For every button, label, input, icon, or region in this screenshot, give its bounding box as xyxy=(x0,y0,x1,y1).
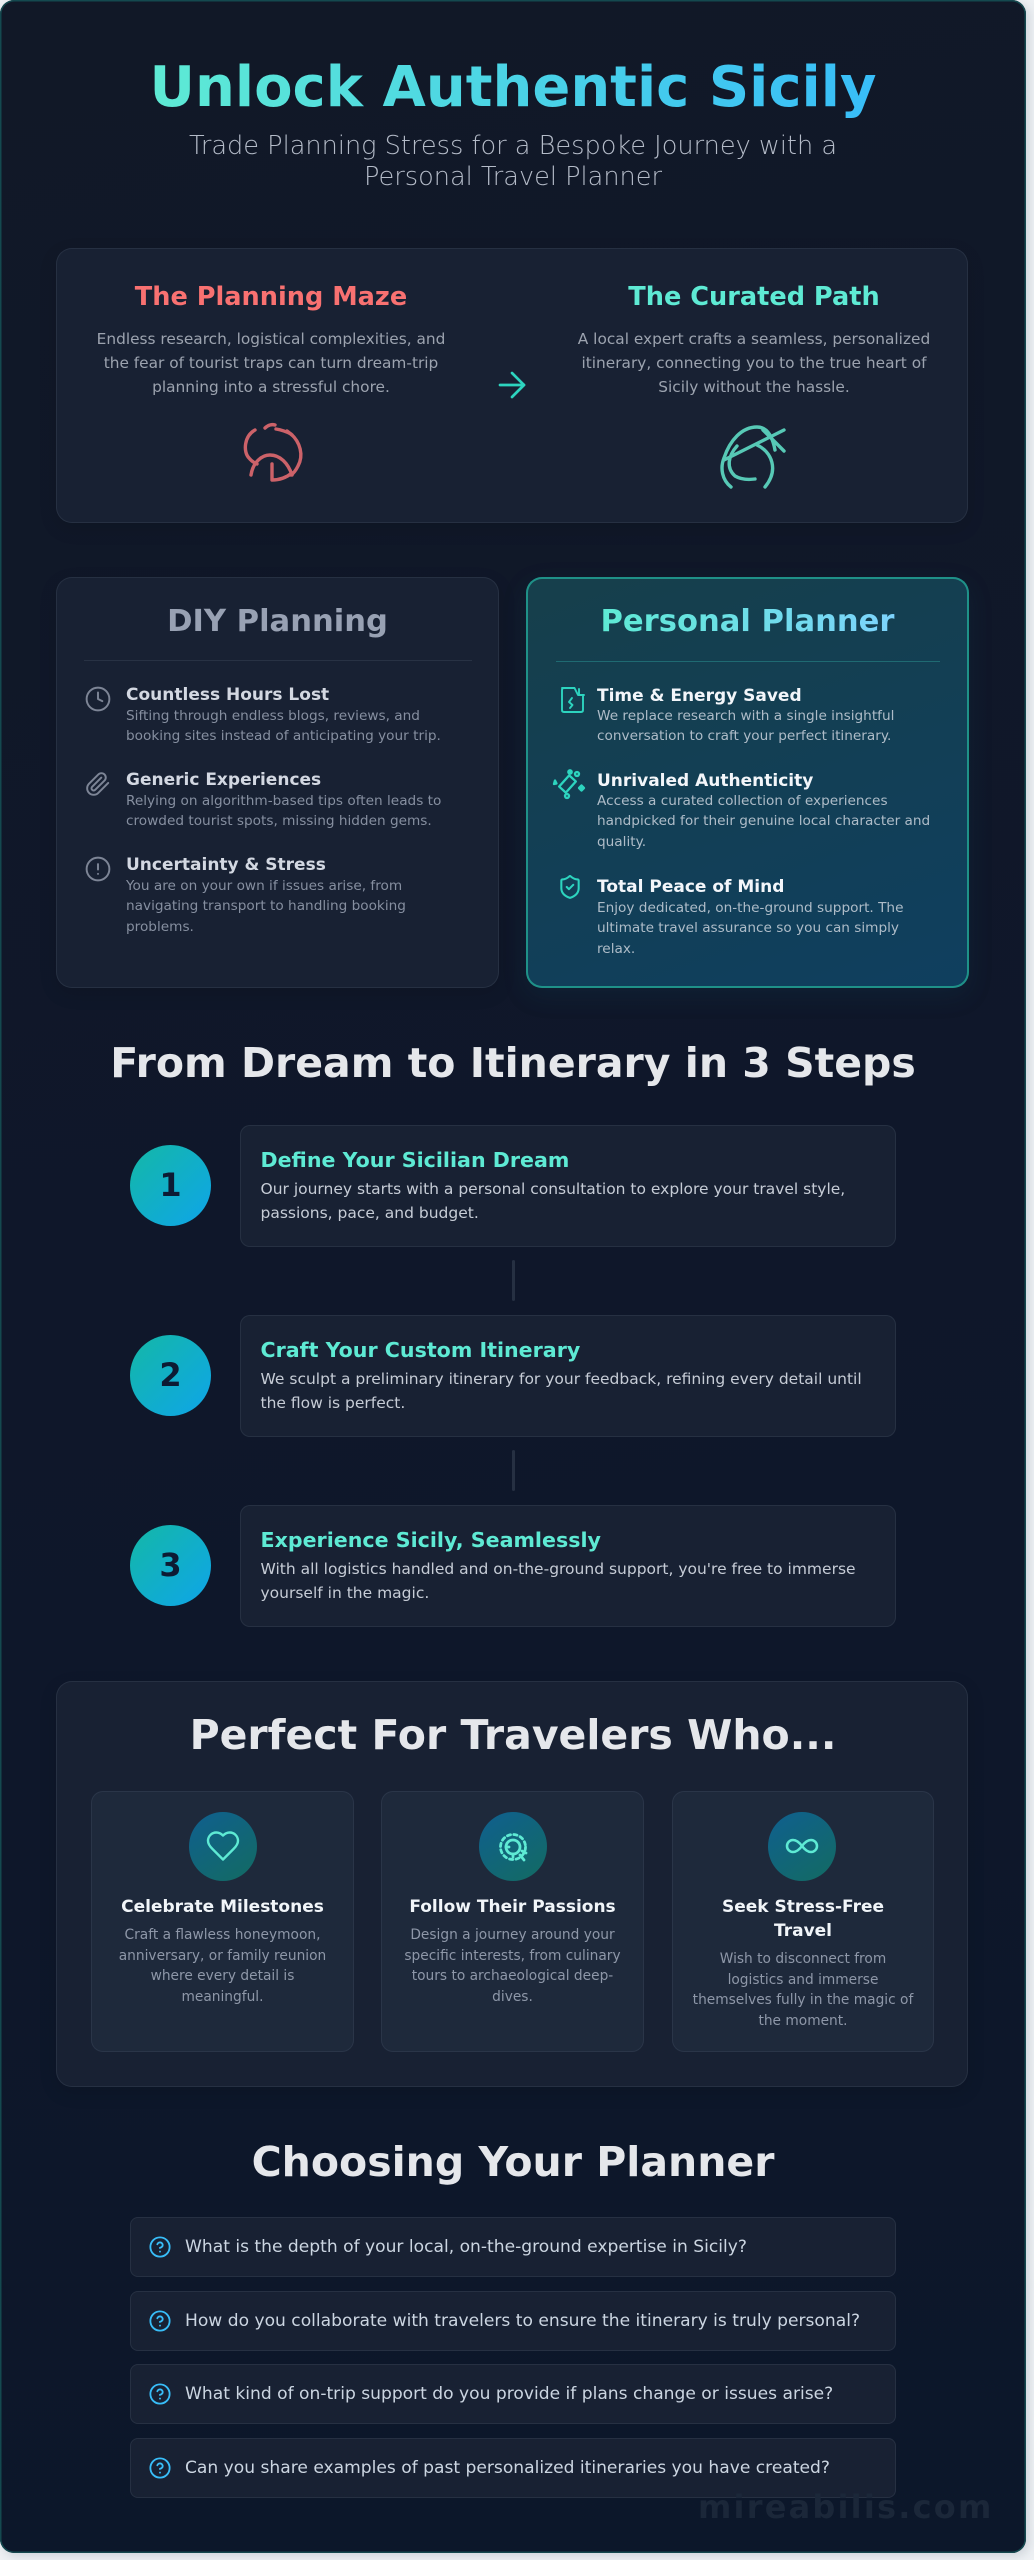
item description: booking sites instead of anticipating your trip. xyxy=(126,728,441,744)
panel: DIY planning xyxy=(56,577,499,988)
card description: anniversary, or family reunion xyxy=(119,1948,326,1964)
card title xyxy=(722,1897,884,1941)
item title: Countless Hours Lost xyxy=(126,685,329,705)
item description: Relying on algorithm-based tips often leads to xyxy=(126,793,441,809)
card description: Wish to disconnect from xyxy=(720,1951,886,1967)
panel: planning maze to curated path xyxy=(56,248,968,523)
card description: dives. xyxy=(492,1988,533,2004)
question text: How do you collaborate with travelers to ensure the itinerary is truly personal? xyxy=(185,2311,860,2331)
item: time and energy saved xyxy=(561,686,894,744)
step 2 description: the flow is perfect. xyxy=(260,1394,405,1412)
question 4 xyxy=(130,2438,896,2498)
card title: Follow Their Passions xyxy=(409,1897,616,1917)
question text: What is the depth of your local, on-the-ground expertise in Sicily? xyxy=(185,2237,747,2257)
heading: the planning maze: The Planning Maze xyxy=(135,282,407,312)
step 3 description: With all logistics handled and on-the-ground support, you're free to immerse xyxy=(260,1560,856,1578)
icon: help circle xyxy=(149,2236,170,2258)
icon: globe path xyxy=(720,425,786,489)
card description: themselves fully in the magic of xyxy=(693,1992,913,2008)
item description: relax. xyxy=(597,941,635,957)
step 1 description xyxy=(260,1180,845,1222)
question text: Can you share examples of past personalized itineraries you have created? xyxy=(185,2458,830,2478)
question 1 xyxy=(130,2217,896,2277)
card description: specific interests, from culinary xyxy=(404,1948,621,1964)
item description: We replace research with a single insightful xyxy=(597,708,894,724)
text: planning maze description xyxy=(97,330,445,396)
card: follow their passions xyxy=(381,1791,644,2052)
item description: ultimate travel assurance so you can simply xyxy=(597,920,899,936)
title: Unlock Authentic Sicily xyxy=(150,55,876,120)
item description: crowded tourist spots, missing hidden gems. xyxy=(126,813,432,829)
icon: alert xyxy=(86,856,110,882)
item description: Access a curated collection of experiences xyxy=(597,793,888,809)
heading: personal planner: Personal Planner xyxy=(600,604,894,639)
step 2 card xyxy=(240,1315,896,1437)
icon: sparkle shapes xyxy=(552,769,586,800)
item: generic experiences xyxy=(86,770,441,829)
item description: quality. xyxy=(597,834,646,850)
card description: logistics and immerse xyxy=(728,1972,878,1988)
step 1 title: Define Your Sicilian Dream xyxy=(260,1148,569,1172)
item title: Time & Energy Saved xyxy=(597,686,802,706)
icon: file with squiggle xyxy=(561,687,585,713)
step 1 description: Our journey starts with a personal consultation to explore your travel style, xyxy=(260,1180,845,1198)
item description xyxy=(126,708,441,744)
card title: Seek Stress-Free xyxy=(722,1897,884,1917)
card: celebrate milestones xyxy=(91,1791,354,2052)
card description: tours to archaeological deep- xyxy=(412,1968,613,1984)
item description: problems. xyxy=(126,919,194,935)
item: total peace of mind xyxy=(560,875,903,957)
step 3 number xyxy=(130,1525,211,1606)
card description xyxy=(693,1951,914,2028)
question text: What kind of on-trip support do you provide if plans change or issues arise? xyxy=(185,2384,833,2404)
text: planning maze description: the fear of tourist traps can turn dream-trip xyxy=(104,354,438,372)
subtitle: Personal Travel Planner xyxy=(364,162,662,192)
item description xyxy=(126,878,406,935)
item title: Unrivaled Authenticity xyxy=(597,771,813,791)
panel: perfect for travelers xyxy=(56,1681,968,2087)
divider xyxy=(84,660,472,661)
item title: Total Peace of Mind xyxy=(597,877,784,897)
card description: Design a journey around your xyxy=(410,1927,615,1943)
step 1 card xyxy=(240,1125,896,1247)
item description xyxy=(126,793,441,829)
card description: Craft a flawless honeymoon, xyxy=(125,1927,320,1943)
item: uncertainty and stress xyxy=(86,855,406,935)
step 1 number: 1 xyxy=(159,1166,182,1204)
connector 1 xyxy=(512,1260,515,1301)
icon: clock xyxy=(86,686,110,712)
card title: Travel xyxy=(774,1921,832,1941)
subtitle: Trade Planning Stress for a Bespoke Journey with a xyxy=(189,131,837,161)
text: planning maze description: Endless research, logistical complexities, and xyxy=(97,330,445,348)
text: curated path description xyxy=(578,330,930,396)
item: unrivaled authenticity xyxy=(552,769,930,850)
step 2 description xyxy=(260,1370,862,1412)
text: curated path description: Sicily without the hassle. xyxy=(658,378,850,396)
question 3 xyxy=(130,2364,896,2424)
heading: from dream to itinerary: From Dream to Itinerary in 3 Steps xyxy=(110,1039,916,1087)
card description: where every detail is xyxy=(151,1968,294,1984)
card description xyxy=(404,1927,621,2004)
text: curated path description: A local expert crafts a seamless, personalized xyxy=(578,330,930,348)
step 1 description: passions, pace, and budget. xyxy=(260,1204,479,1222)
text: curated path description: itinerary, connecting you to the true heart of xyxy=(581,354,927,372)
card description xyxy=(119,1927,326,2004)
step 2 description: We sculpt a preliminary itinerary for your feedback, refining every detail until xyxy=(260,1370,862,1388)
item description xyxy=(597,900,903,957)
icon: help circle xyxy=(149,2384,170,2404)
step 3 description xyxy=(260,1560,856,1602)
card description: meaningful. xyxy=(181,1988,264,2004)
item description: navigating transport to handling booking xyxy=(126,898,406,914)
step 3 description: yourself in the magic. xyxy=(260,1584,429,1602)
arrow xyxy=(498,372,526,398)
item description: You are on your own if issues arise, from xyxy=(126,878,402,894)
card title: Celebrate Milestones xyxy=(121,1897,324,1917)
step 3 card xyxy=(240,1505,896,1627)
item: countless hours lost xyxy=(86,685,441,744)
heading: perfect for travelers who: Perfect For Travelers Who... xyxy=(190,1711,836,1759)
panel: personal planner xyxy=(526,577,969,988)
item description: handpicked for their genuine local character and xyxy=(597,813,930,829)
item title: Generic Experiences xyxy=(126,770,321,790)
heading: the curated path: The Curated Path xyxy=(628,282,880,312)
icon: help circle xyxy=(149,2458,170,2478)
item title: Uncertainty & Stress xyxy=(126,855,326,875)
icon: tangled maze xyxy=(244,422,303,482)
icon: paperclip xyxy=(86,772,110,796)
item description: Enjoy dedicated, on-the-ground support. The xyxy=(597,900,903,916)
icon: heart in circle xyxy=(189,1812,257,1881)
connector 2 xyxy=(512,1450,515,1491)
item description: Sifting through endless blogs, reviews, and xyxy=(126,708,420,724)
item description: conversation to craft your perfect itinerary. xyxy=(597,728,891,744)
heading: DIY planning: DIY Planning xyxy=(167,604,388,639)
icon: help circle xyxy=(149,2310,170,2332)
watermark: mireabilis.com xyxy=(698,2488,994,2526)
heading: choosing your planner: Choosing Your Planner xyxy=(252,2138,774,2186)
subtitle xyxy=(189,131,837,192)
card description: the moment. xyxy=(758,2012,848,2028)
icon: infinity in circle xyxy=(768,1812,836,1881)
step 2 number: 2 xyxy=(159,1356,182,1394)
divider xyxy=(556,661,940,662)
icon: shield check xyxy=(560,875,580,899)
step 3 title: Experience Sicily, Seamlessly xyxy=(260,1528,601,1552)
step 3 number: 3 xyxy=(159,1546,182,1584)
item description xyxy=(597,708,894,744)
step 1 number xyxy=(130,1145,211,1226)
card: seek stress-free travel xyxy=(672,1791,934,2052)
step 2 title: Craft Your Custom Itinerary xyxy=(260,1338,580,1362)
step 2 number xyxy=(130,1335,211,1416)
text: planning maze description: planning into a stressful chore. xyxy=(152,378,390,396)
icon: dashed gear in circle xyxy=(479,1812,547,1881)
question 2 xyxy=(130,2291,896,2351)
item description xyxy=(597,793,930,850)
